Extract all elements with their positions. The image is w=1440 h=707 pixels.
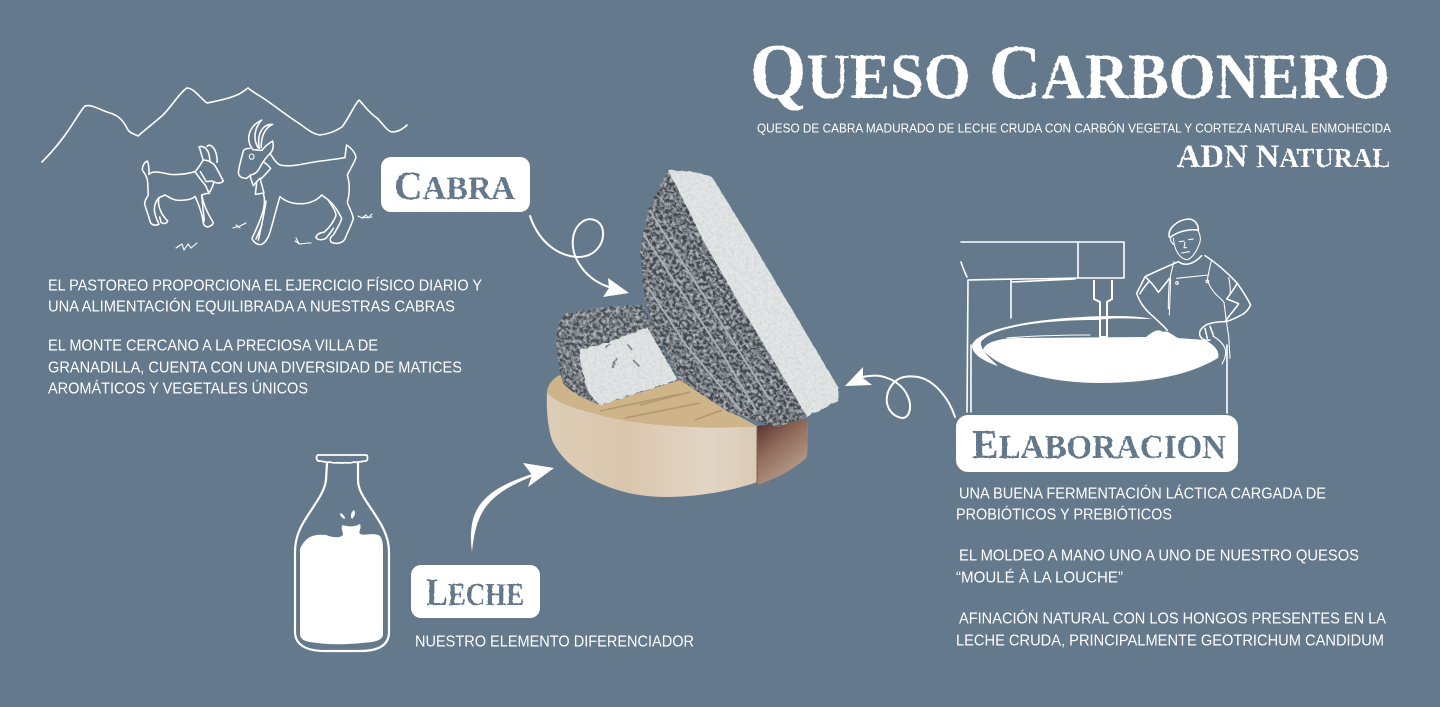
cheese photo — [547, 170, 838, 497]
label: Cabra — [381, 157, 530, 212]
text block: elaboracion: PROBIÓTICOS Y PREBIÓTICOS — [956, 506, 1172, 524]
illustration: milk bottle — [295, 455, 389, 651]
brand line: ADN NATURAL — [1177, 139, 1390, 175]
small cheese wedge — [557, 305, 678, 405]
text block: cabra: GRANADILLA, CUENTA CON UNA DIVERSIDAD DE MATICES — [48, 360, 462, 376]
illustration: grass tufts — [176, 214, 372, 250]
arrow: elaboracion to cheese — [845, 367, 955, 418]
label: Cabra: CABRA — [394, 163, 515, 208]
text block: elaboracion: UNA BUENA FERMENTACIÓN LÁCTICA CARGADA DE — [959, 486, 1326, 502]
text block: cabra: EL MONTE CERCANO A LA PRECIOSA VILLA DE — [48, 338, 378, 354]
illustration: small goat — [142, 145, 223, 227]
text block: elaboracion: “MOULÉ À LA LOUCHE” — [956, 570, 1123, 586]
text block: cabra: AROMÁTICOS Y VEGETALES ÚNICOS — [48, 380, 308, 398]
label: Elaboracion: ELABORACION — [972, 421, 1226, 467]
text block: leche: NUESTRO ELEMENTO DIFERENCIADOR — [415, 634, 694, 650]
illustration: cheesemaker — [1137, 219, 1251, 358]
label: Leche: LECHE — [426, 571, 524, 614]
text block: elaboracion — [956, 486, 1387, 650]
text block: elaboracion: AFINACIÓN NATURAL CON LOS HONGOS PRESENTES EN LA — [959, 610, 1387, 628]
text block: cabra — [48, 278, 482, 398]
arrow: cabra to cheese — [530, 216, 629, 297]
illustration: vat machine — [961, 242, 1227, 413]
wooden box — [547, 375, 808, 497]
text block: cabra: EL PASTOREO PROPORCIONA EL EJERCICIO FÍSICO DIARIO Y — [48, 278, 482, 294]
text block: elaboracion: LECHE CRUDA, PRINCIPALMENTE GEOTRICHUM CANDIDUM — [956, 632, 1384, 650]
illustration: large goat — [238, 120, 356, 245]
text block: cabra: UNA ALIMENTACIÓN EQUILIBRADA A NUESTRAS CABRAS — [48, 298, 455, 316]
text block: elaboracion: EL MOLDEO A MANO UNO A UNO DE NUESTRO QUESOS — [959, 548, 1359, 564]
subtitle: QUESO DE CABRA MADURADO DE LECHE CRUDA CON CARBÓN VEGETAL Y CORTEZA NATURAL ENMOHECIDA — [757, 120, 1392, 136]
large cheese wedge — [640, 170, 838, 427]
illustration: mountains — [42, 88, 407, 162]
title: QUESO CARBONERO — [750, 28, 1390, 115]
arrow: leche to cheese — [471, 463, 554, 552]
illustration: milk in vat — [983, 330, 1218, 383]
